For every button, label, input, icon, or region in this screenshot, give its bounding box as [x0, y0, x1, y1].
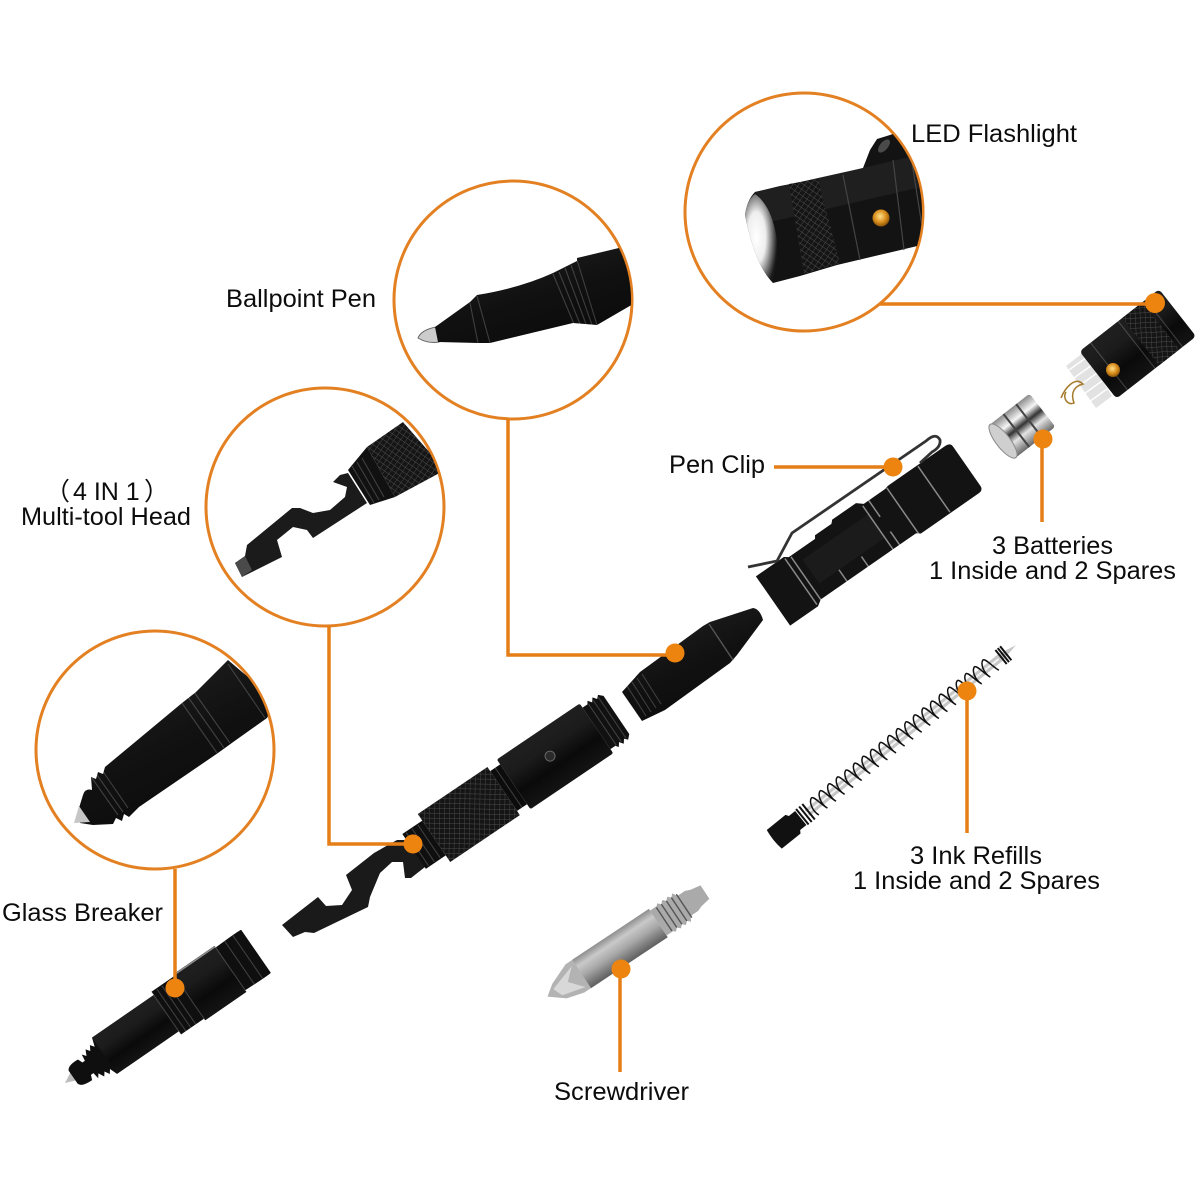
leader: screwdriver: [612, 960, 630, 1072]
label: ink refills: 3 Ink Refills: [910, 842, 1042, 870]
leader: pen clip: [774, 458, 902, 476]
callout circle: multi-tool head: [206, 388, 445, 626]
screwdriver bit: [538, 878, 714, 1011]
leader: glass breaker: [166, 869, 184, 998]
pen part: glass breaker end: [49, 928, 272, 1106]
callout circle: LED flashlight: [685, 93, 930, 331]
label: LED Flashlight: LED Flashlight: [911, 120, 1077, 148]
label: Pen Clip: Pen Clip: [669, 451, 765, 479]
label: 4 in 1 multi-tool head: ）: [144, 478, 169, 506]
pen part: pen clip: [748, 436, 940, 567]
label: ink refills: [853, 842, 1100, 895]
callout circle: ballpoint pen: [394, 181, 640, 419]
callout circle: glass breaker: [36, 631, 275, 869]
label: 4 in 1 multi-tool head: [21, 478, 191, 531]
pen part: multi-tool blade: [282, 840, 425, 937]
icon: gold button: [1106, 363, 1120, 377]
leader: LED flashlight: [880, 293, 1165, 313]
label: Ballpoint Pen: Ballpoint Pen: [226, 285, 376, 313]
pen part: knurled middle section: [397, 690, 633, 876]
icon: gold button: [872, 210, 890, 226]
label: Screwdriver: Screwdriver: [554, 1078, 689, 1106]
label: 4 in 1 multi-tool head: 4 IN 1: [73, 478, 140, 506]
label: 4 in 1 multi-tool head: （: [45, 478, 70, 506]
label: ink refills: 1 Inside and 2 Spares: [853, 867, 1100, 895]
leader: multi-tool head: [329, 626, 422, 854]
label: batteries: [929, 532, 1176, 585]
pen part: flashlight head: [1061, 289, 1196, 408]
pen part: barrel: [754, 439, 984, 626]
pen part: ballpoint section: [622, 608, 763, 721]
ink refill with spring: [766, 636, 1023, 849]
leader: batteries: [1034, 430, 1052, 522]
batteries: [985, 394, 1055, 462]
label: Glass Breaker: Glass Breaker: [2, 899, 163, 927]
small side hole: [543, 749, 557, 763]
leader: ink refills: [958, 682, 976, 833]
label: batteries: 3 Batteries: [992, 532, 1113, 560]
label: batteries: 1 Inside and 2 Spares: [929, 557, 1176, 585]
label: 4 in 1 multi-tool head: Multi-tool Head: [21, 503, 191, 531]
leader: ballpoint pen: [508, 419, 684, 662]
